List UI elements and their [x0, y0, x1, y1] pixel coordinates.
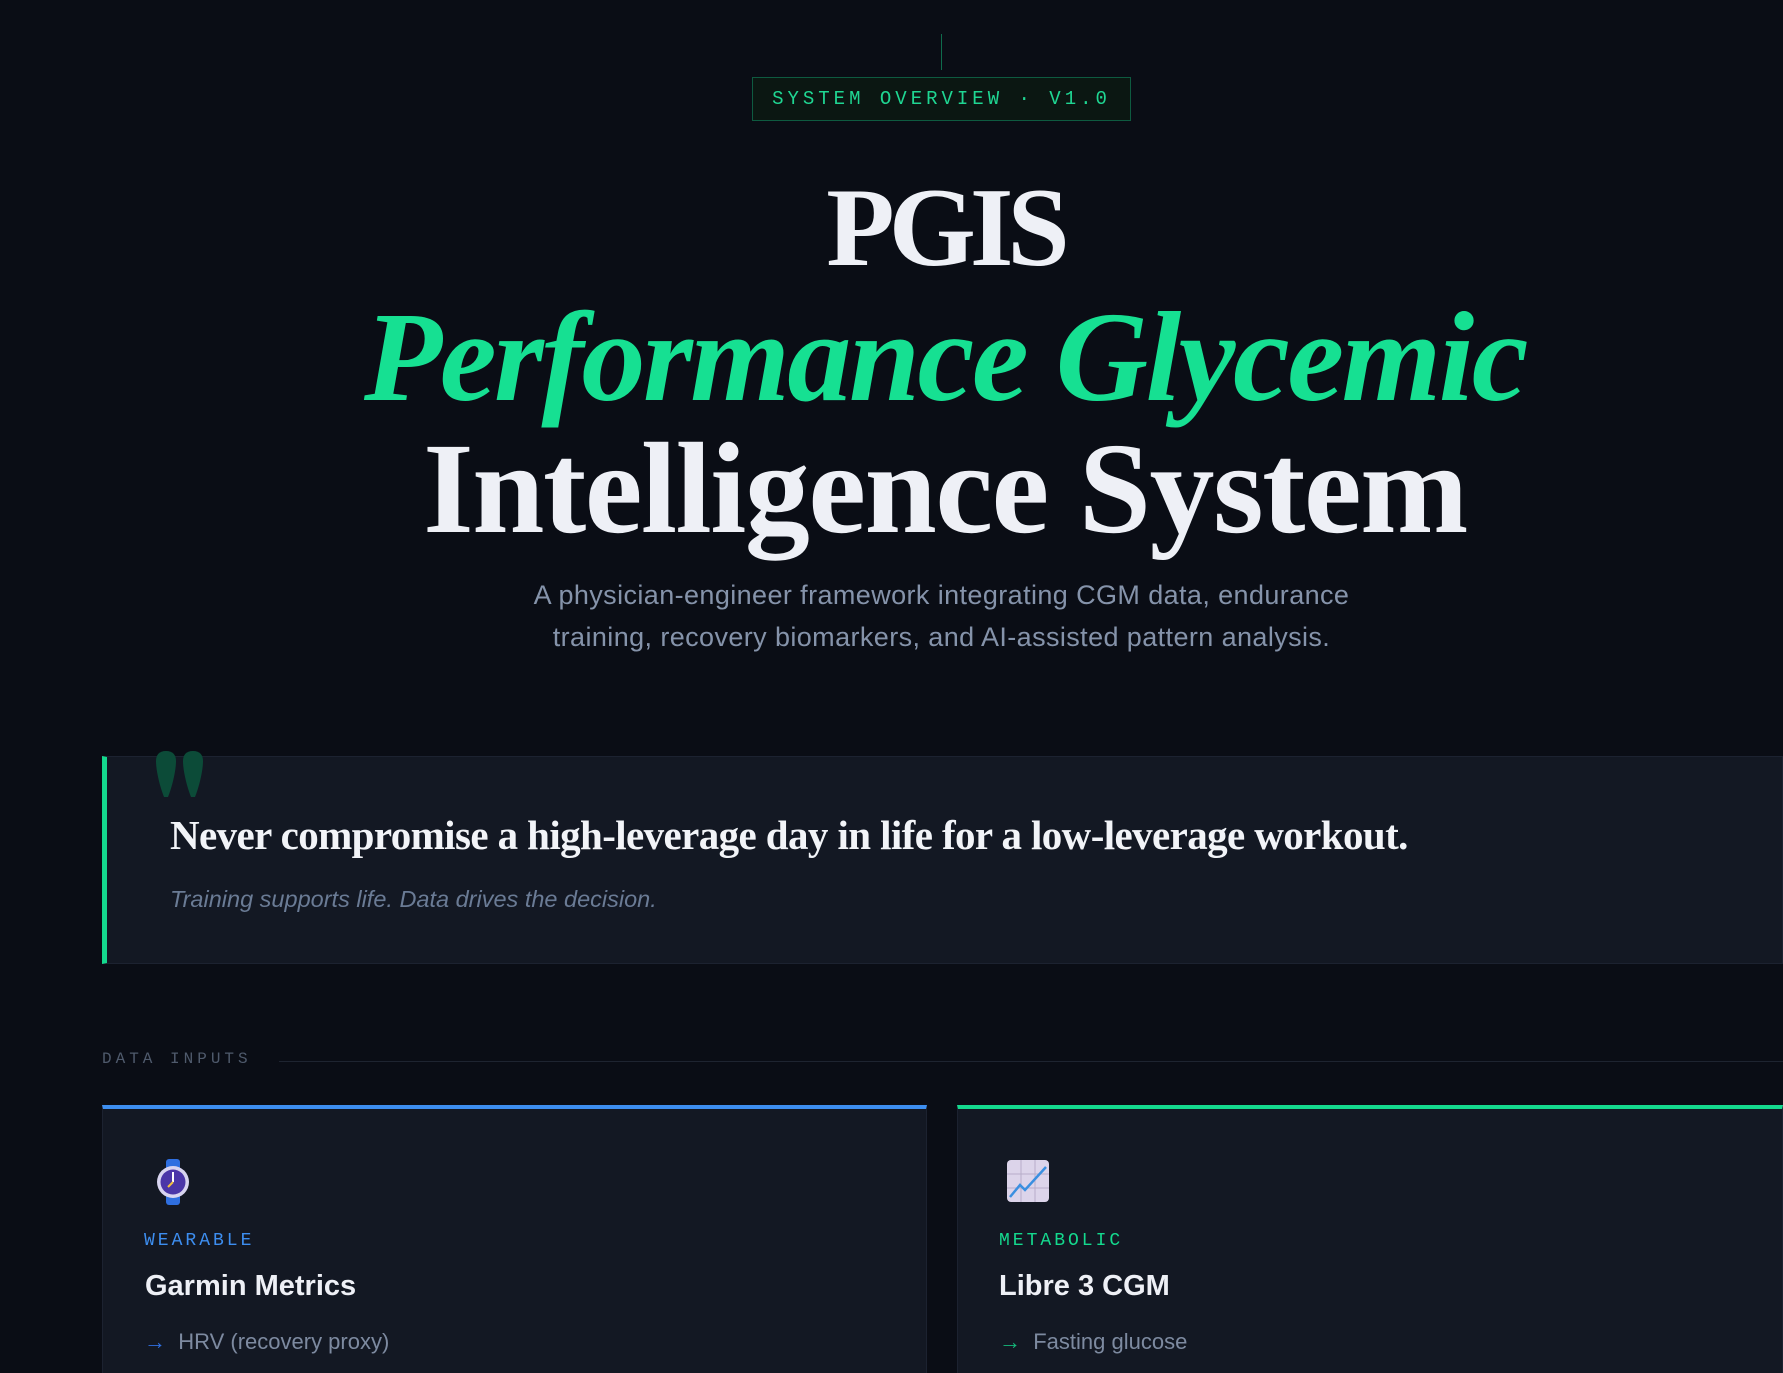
icon: watch	[157, 1159, 189, 1205]
title: PGIS: PGIS	[826, 166, 1064, 290]
subtitle: training, recovery biomarkers, and AI-assisted pattern analysis.	[553, 622, 1330, 652]
card title: Garmin Metrics	[145, 1270, 356, 1302]
quote caption: Training supports life. Data drives the decision.	[170, 886, 657, 912]
list item: → HRV (recovery proxy)	[144, 1329, 389, 1354]
icon: chart	[1007, 1160, 1049, 1202]
category: metabolic: METABOLIC	[999, 1231, 1123, 1251]
section label: data inputs: DATA INPUTS	[102, 1050, 252, 1068]
subtitle: A physician-engineer framework integrating CGM data, endurance	[534, 580, 1349, 610]
icon: quote marks	[156, 751, 203, 797]
badge: system overview: SYSTEM OVERVIEW · V1.0	[772, 88, 1111, 110]
list item: → Fasting glucose	[999, 1329, 1187, 1354]
panel: quote	[102, 756, 1783, 964]
badge: system overview	[752, 77, 1131, 121]
quote text: Never compromise a high-leverage day in life for a low-leverage workout.	[170, 812, 1408, 858]
subtitle	[534, 580, 1349, 652]
decorative top line	[941, 34, 942, 70]
card title: Libre 3 CGM	[999, 1270, 1170, 1302]
card: garmin	[102, 1105, 927, 1373]
card: libre	[957, 1105, 1783, 1373]
title: Performance Glycemic: Performance Glycemic	[364, 286, 1526, 428]
title: Intelligence System: Intelligence System	[423, 417, 1467, 561]
category: wearable: WEARABLE	[144, 1231, 254, 1251]
